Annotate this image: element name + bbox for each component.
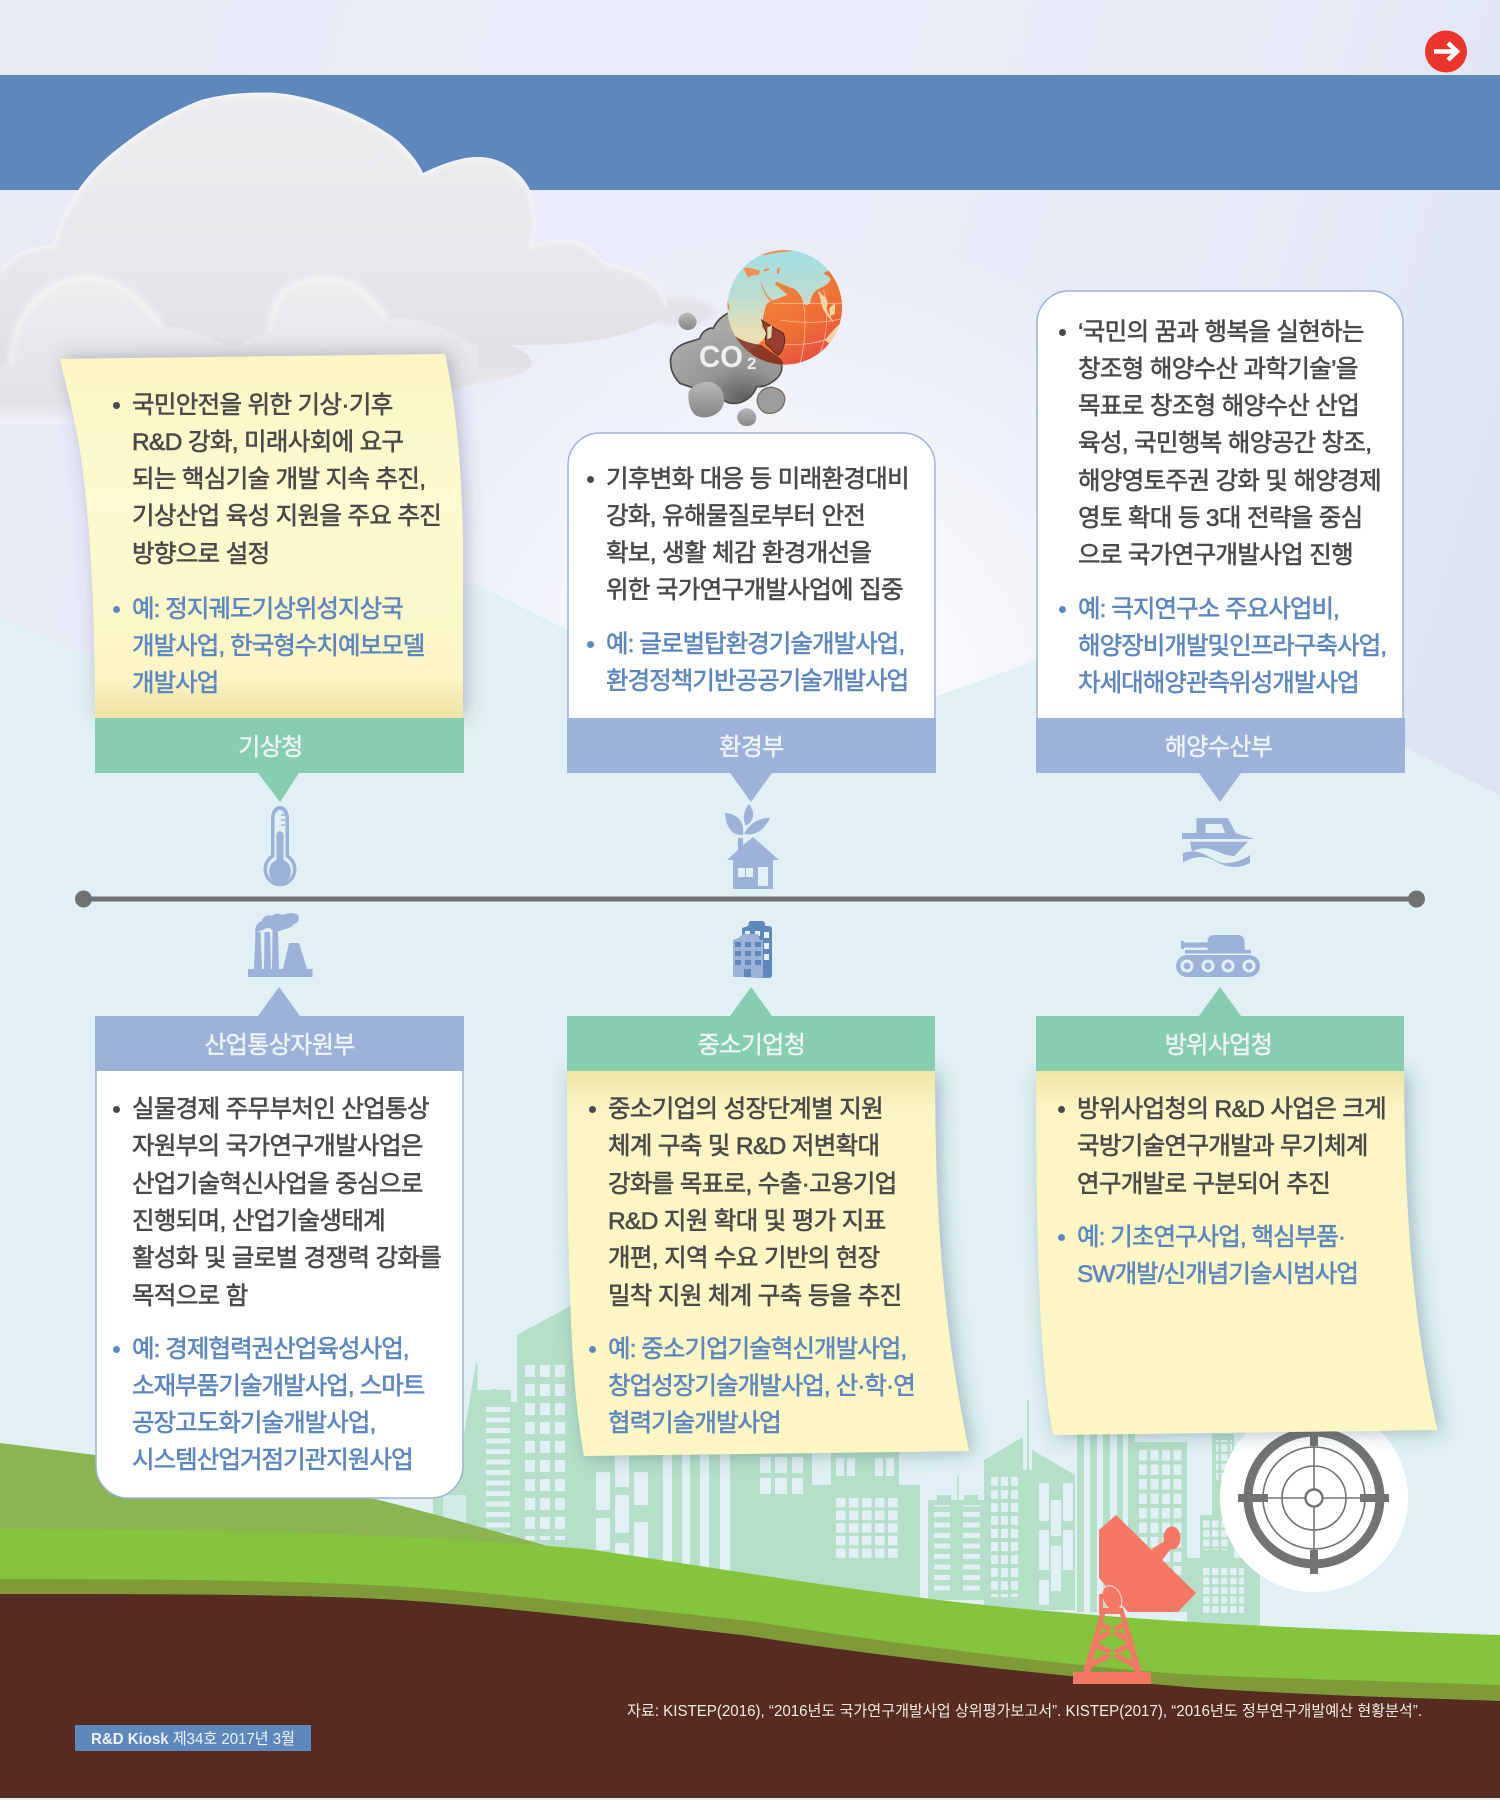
icon: thermometer: [264, 806, 296, 886]
body text: 진행되며, 산업기술생태계: [132, 1208, 385, 1235]
source note: 자료: KISTEP(2016), “2016년도 국가연구개발사업 상위평가보고서”. KISTEP(2017), “2016년도 정부연구개발예산 현황분석”.: [627, 1702, 1422, 1720]
example text: 예: 중소기업기술혁신개발사업,: [608, 1336, 906, 1363]
sky glow: [0, 0, 1500, 1000]
example text: 공장고도화기술개발사업,: [132, 1410, 375, 1437]
body text: 기상산업 육성 지원을 주요 추진: [132, 503, 441, 530]
label bar: [95, 718, 464, 802]
icon: factory: [248, 913, 312, 977]
body text: 산업기술혁신사업을 중심으로: [132, 1171, 423, 1198]
body text: 체계 구축 및 R&D 저변확대: [608, 1133, 879, 1160]
body text: [132, 387, 441, 573]
body text: 국방기술연구개발과 무기체계: [1077, 1133, 1368, 1160]
city skyline: [433, 1290, 1260, 1628]
panel: 기상청: [58, 343, 475, 802]
card: [96, 1068, 463, 1498]
example text: 예: 경제협력권산업육성사업,: [132, 1336, 409, 1363]
header band: [0, 75, 1500, 190]
body text: [1078, 314, 1381, 575]
panel: 해양수산부: [1036, 290, 1405, 802]
icon: ship: [1182, 818, 1254, 867]
body text: 기후변화 대응 등 미래환경대비: [606, 466, 909, 493]
icon: CO2 cloud and warming globe: 2: [747, 354, 756, 373]
body text: 목표로 창조형 해양수산 산업: [1078, 393, 1359, 420]
icon: tank: [1176, 935, 1260, 977]
sticky note: [1036, 1071, 1438, 1435]
body text: 밀착 지원 체계 구축 등을 추진: [608, 1283, 901, 1310]
icon: office building: [733, 921, 772, 978]
mountains: [0, 582, 1500, 1800]
label text: 산업통상자원부: [204, 1032, 355, 1059]
panel: 환경부: [567, 432, 936, 802]
target reticle: [1220, 1404, 1408, 1592]
body text: 육성, 국민행복 해양공간 창조,: [1078, 430, 1371, 457]
ground: grass: [0, 1529, 1500, 1720]
body text: 연구개발로 구분되어 추진: [1077, 1171, 1330, 1198]
body text: 방위사업청의 R&D 사업은 크게: [1077, 1096, 1386, 1123]
card: [1037, 291, 1403, 720]
icon: CO2 cloud and warming globe: [671, 250, 847, 426]
example text: 예: 글로벌탑환경기술개발사업,: [606, 631, 904, 658]
example text: 창업성장기술개발사업, 산·학·연: [608, 1373, 915, 1400]
panel: 산업통상자원부: [95, 987, 464, 1499]
body text: [1077, 1091, 1386, 1203]
example text: [132, 1331, 424, 1480]
body text: 개편, 지역 수요 기반의 현장: [608, 1245, 880, 1272]
example text: [608, 1331, 915, 1442]
satellite dish tower: [1073, 1515, 1196, 1684]
body text: 중소기업의 성장단계별 지원: [608, 1096, 883, 1123]
body text: 자원부의 국가연구개발사업은: [132, 1133, 423, 1160]
body text: 목적으로 함: [132, 1283, 248, 1310]
label bar: [1036, 987, 1404, 1071]
body text: ‘국민의 꿈과 행복을 실현하는: [1078, 319, 1364, 346]
label text: 방위사업청: [1165, 1032, 1272, 1059]
example text: [606, 626, 908, 700]
example text: 환경정책기반공공기술개발사업: [606, 668, 908, 695]
example text: 협력기술개발사업: [608, 1410, 781, 1437]
ground: olive strip: [0, 1579, 1500, 1750]
body text: 영토 확대 등 3대 전략을 중심: [1078, 505, 1363, 532]
example text: 개발사업: [132, 670, 218, 697]
body text: 해양영토주권 강화 및 해양경제: [1078, 468, 1381, 495]
icon: CO2 cloud and warming globe: CO: [699, 339, 743, 374]
example text: SW개발/신개념기술시범사업: [1077, 1261, 1358, 1288]
example text: 소재부품기술개발사업, 스마트: [132, 1373, 424, 1400]
icon: eco house: [725, 804, 779, 889]
label text: 중소기업청: [698, 1032, 805, 1059]
ground: soil: [0, 1594, 1500, 1798]
body text: 되는 핵심기술 개발 지속 추진,: [132, 466, 425, 493]
example text: 해양장비개발및인프라구축사업,: [1078, 633, 1386, 660]
example text: 예: 정지궤도기상위성지상국: [132, 596, 403, 623]
body text: 활성화 및 글로벌 경쟁력 강화를: [132, 1245, 441, 1272]
panel: 중소기업청: [560, 987, 982, 1469]
card: [568, 433, 935, 720]
body text: R&D 지원 확대 및 평가 지표: [608, 1208, 886, 1235]
example text: [1078, 591, 1386, 702]
issue tag: [75, 1725, 311, 1751]
body text: [608, 1091, 901, 1315]
label text: 해양수산부: [1165, 734, 1272, 761]
example text: 차세대해양관측위성개발사업: [1078, 670, 1359, 697]
cloud: [0, 93, 716, 424]
label bar: [1036, 718, 1405, 802]
body text: [606, 461, 909, 610]
timeline axis: [75, 890, 1425, 908]
panel: 방위사업청: [1028, 987, 1450, 1448]
body text: 창조형 해양수산 과학기술’을: [1078, 356, 1358, 383]
issue tag: R&D Kiosk 제34호 2017년 3월: [91, 1730, 295, 1748]
example text: [1077, 1219, 1358, 1293]
body text: R&D 강화, 미래사회에 요구: [132, 429, 403, 456]
body text: [132, 1091, 441, 1315]
example text: 예: 기초연구사업, 핵심부품·: [1077, 1224, 1345, 1251]
label bar: [567, 718, 936, 802]
ground: back hill: [0, 1443, 600, 1640]
example text: 예: 극지연구소 주요사업비,: [1078, 596, 1339, 623]
label bar: [567, 987, 935, 1071]
body text: 확보, 생활 체감 환경개선을: [606, 540, 871, 567]
body text: 위한 국가연구개발사업에 집중: [606, 577, 903, 604]
sticky note: [567, 1071, 969, 1456]
arrow button: [1425, 30, 1467, 72]
body text: 국민안전을 위한 기상·기후: [132, 392, 393, 419]
example text: [132, 591, 424, 702]
sticky note: [60, 354, 463, 718]
example text: 시스템산업거점기관지원사업: [132, 1447, 413, 1474]
label text: 기상청: [238, 734, 303, 761]
label bar: [95, 987, 464, 1071]
example text: 개발사업, 한국형수치예보모델: [132, 633, 424, 660]
body text: 강화를 목표로, 수출·고용기업: [608, 1171, 897, 1198]
body text: 으로 국가연구개발사업 진행: [1078, 542, 1353, 569]
body text: 방향으로 설정: [132, 541, 270, 568]
body text: 강화, 유해물질로부터 안전: [606, 503, 865, 530]
label text: 환경부: [719, 734, 784, 761]
body text: 실물경제 주무부처인 산업통상: [132, 1096, 429, 1123]
